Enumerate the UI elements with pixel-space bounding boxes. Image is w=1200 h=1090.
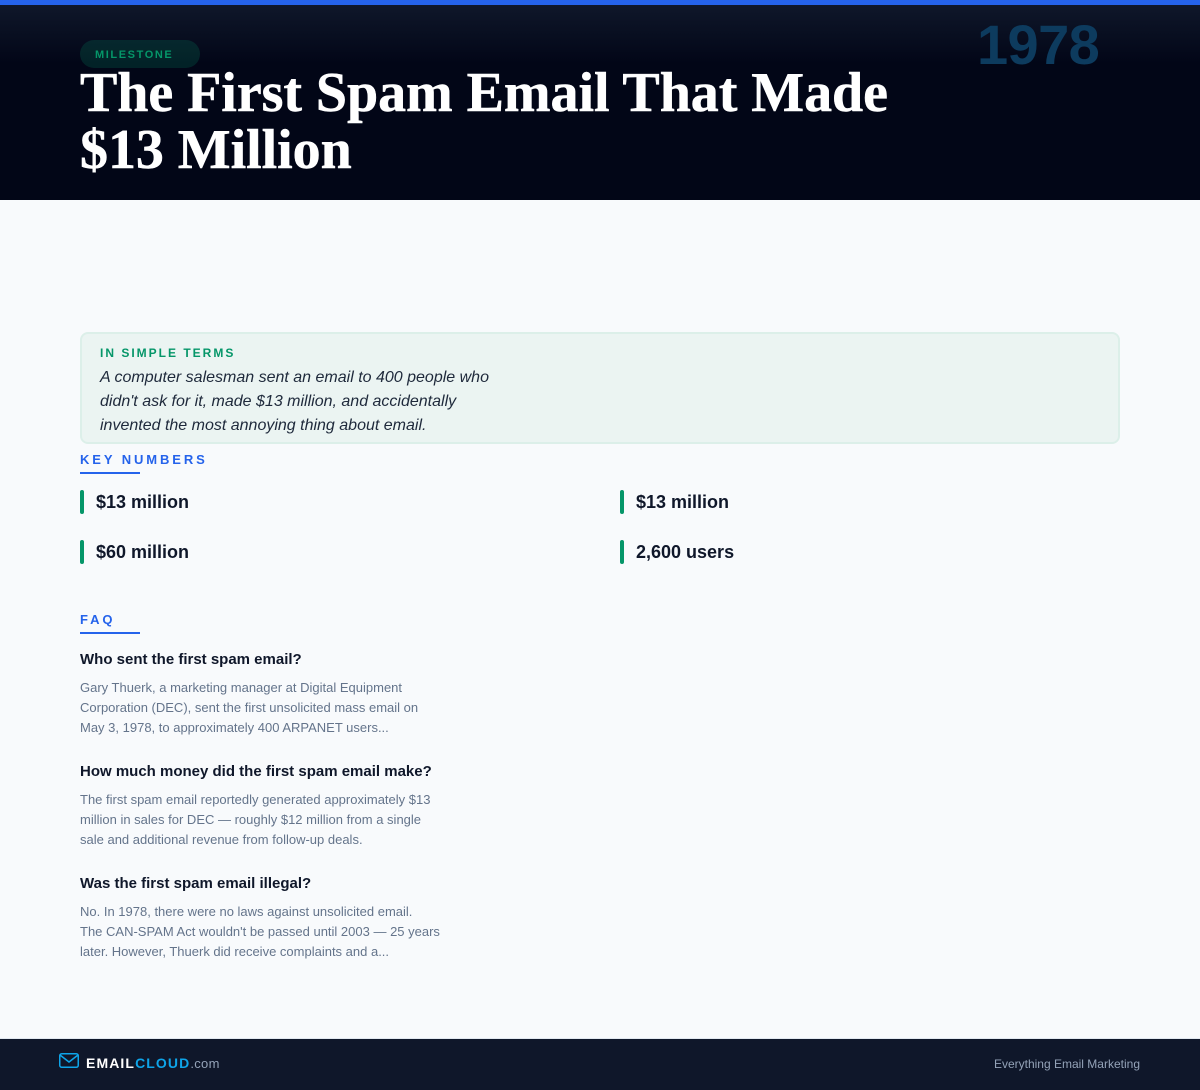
panel: in simple terms xyxy=(80,332,1120,444)
faq item 3: The CAN-SPAM Act wouldn't be passed until 2003 — 25 years xyxy=(80,924,440,939)
title xyxy=(80,62,888,181)
callout text xyxy=(99,369,489,434)
callout text: invented the most annoying thing about email. xyxy=(100,417,426,434)
title: $13 Million xyxy=(80,119,352,181)
faq item 1 xyxy=(80,651,418,735)
tagline: Everything Email Marketing xyxy=(994,1057,1140,1071)
faq item 3: No. In 1978, there were no laws against unsolicited email. xyxy=(80,904,412,919)
stat: $13 million: $13 million xyxy=(96,492,189,512)
stat: $60 million: $60 million xyxy=(96,542,189,562)
heading: key numbers: KEY NUMBERS xyxy=(80,452,208,467)
faq item 2: sale and additional revenue from follow-up deals. xyxy=(80,832,363,847)
title: The First Spam Email That Made xyxy=(80,62,888,124)
callout label: IN SIMPLE TERMS xyxy=(100,346,235,360)
callout text: A computer salesman sent an email to 400 people who xyxy=(100,369,489,386)
faq item 1: May 3, 1978, to approximately 400 ARPANET users... xyxy=(80,720,389,735)
stat: 2,600 users: 2,600 users xyxy=(636,542,734,562)
callout text: didn't ask for it, made $13 million, and accidentally xyxy=(100,393,456,410)
faq item 1: Gary Thuerk, a marketing manager at Digital Equipment xyxy=(80,680,402,695)
faq item 1: Corporation (DEC), sent the first unsolicited mass email on xyxy=(80,700,418,715)
header band xyxy=(0,0,1200,200)
faq item 3: Was the first spam email illegal? xyxy=(80,875,311,892)
faq item 2: How much money did the first spam email make? xyxy=(80,763,432,780)
faq item 2: The first spam email reportedly generated approximately $13 xyxy=(80,792,430,807)
faq item 2: million in sales for DEC — roughly $12 million from a single xyxy=(80,812,421,827)
stat: $13 million second: $13 million xyxy=(636,492,729,512)
milestone badge xyxy=(80,40,200,68)
faq item 1: Who sent the first spam email? xyxy=(80,651,302,668)
faq item 3 xyxy=(80,875,440,959)
year watermark: 1978 xyxy=(977,13,1099,76)
icon: envelope xyxy=(59,1053,79,1068)
footer xyxy=(0,1038,1200,1090)
faq item 3: later. However, Thuerk did receive complaints and a... xyxy=(80,944,389,959)
faq item 2 xyxy=(80,763,432,847)
milestone badge: MILESTONE xyxy=(95,49,173,61)
logo wordmark: EMAILCLOUD.com xyxy=(86,1055,220,1071)
heading: faq: FAQ xyxy=(80,612,115,627)
